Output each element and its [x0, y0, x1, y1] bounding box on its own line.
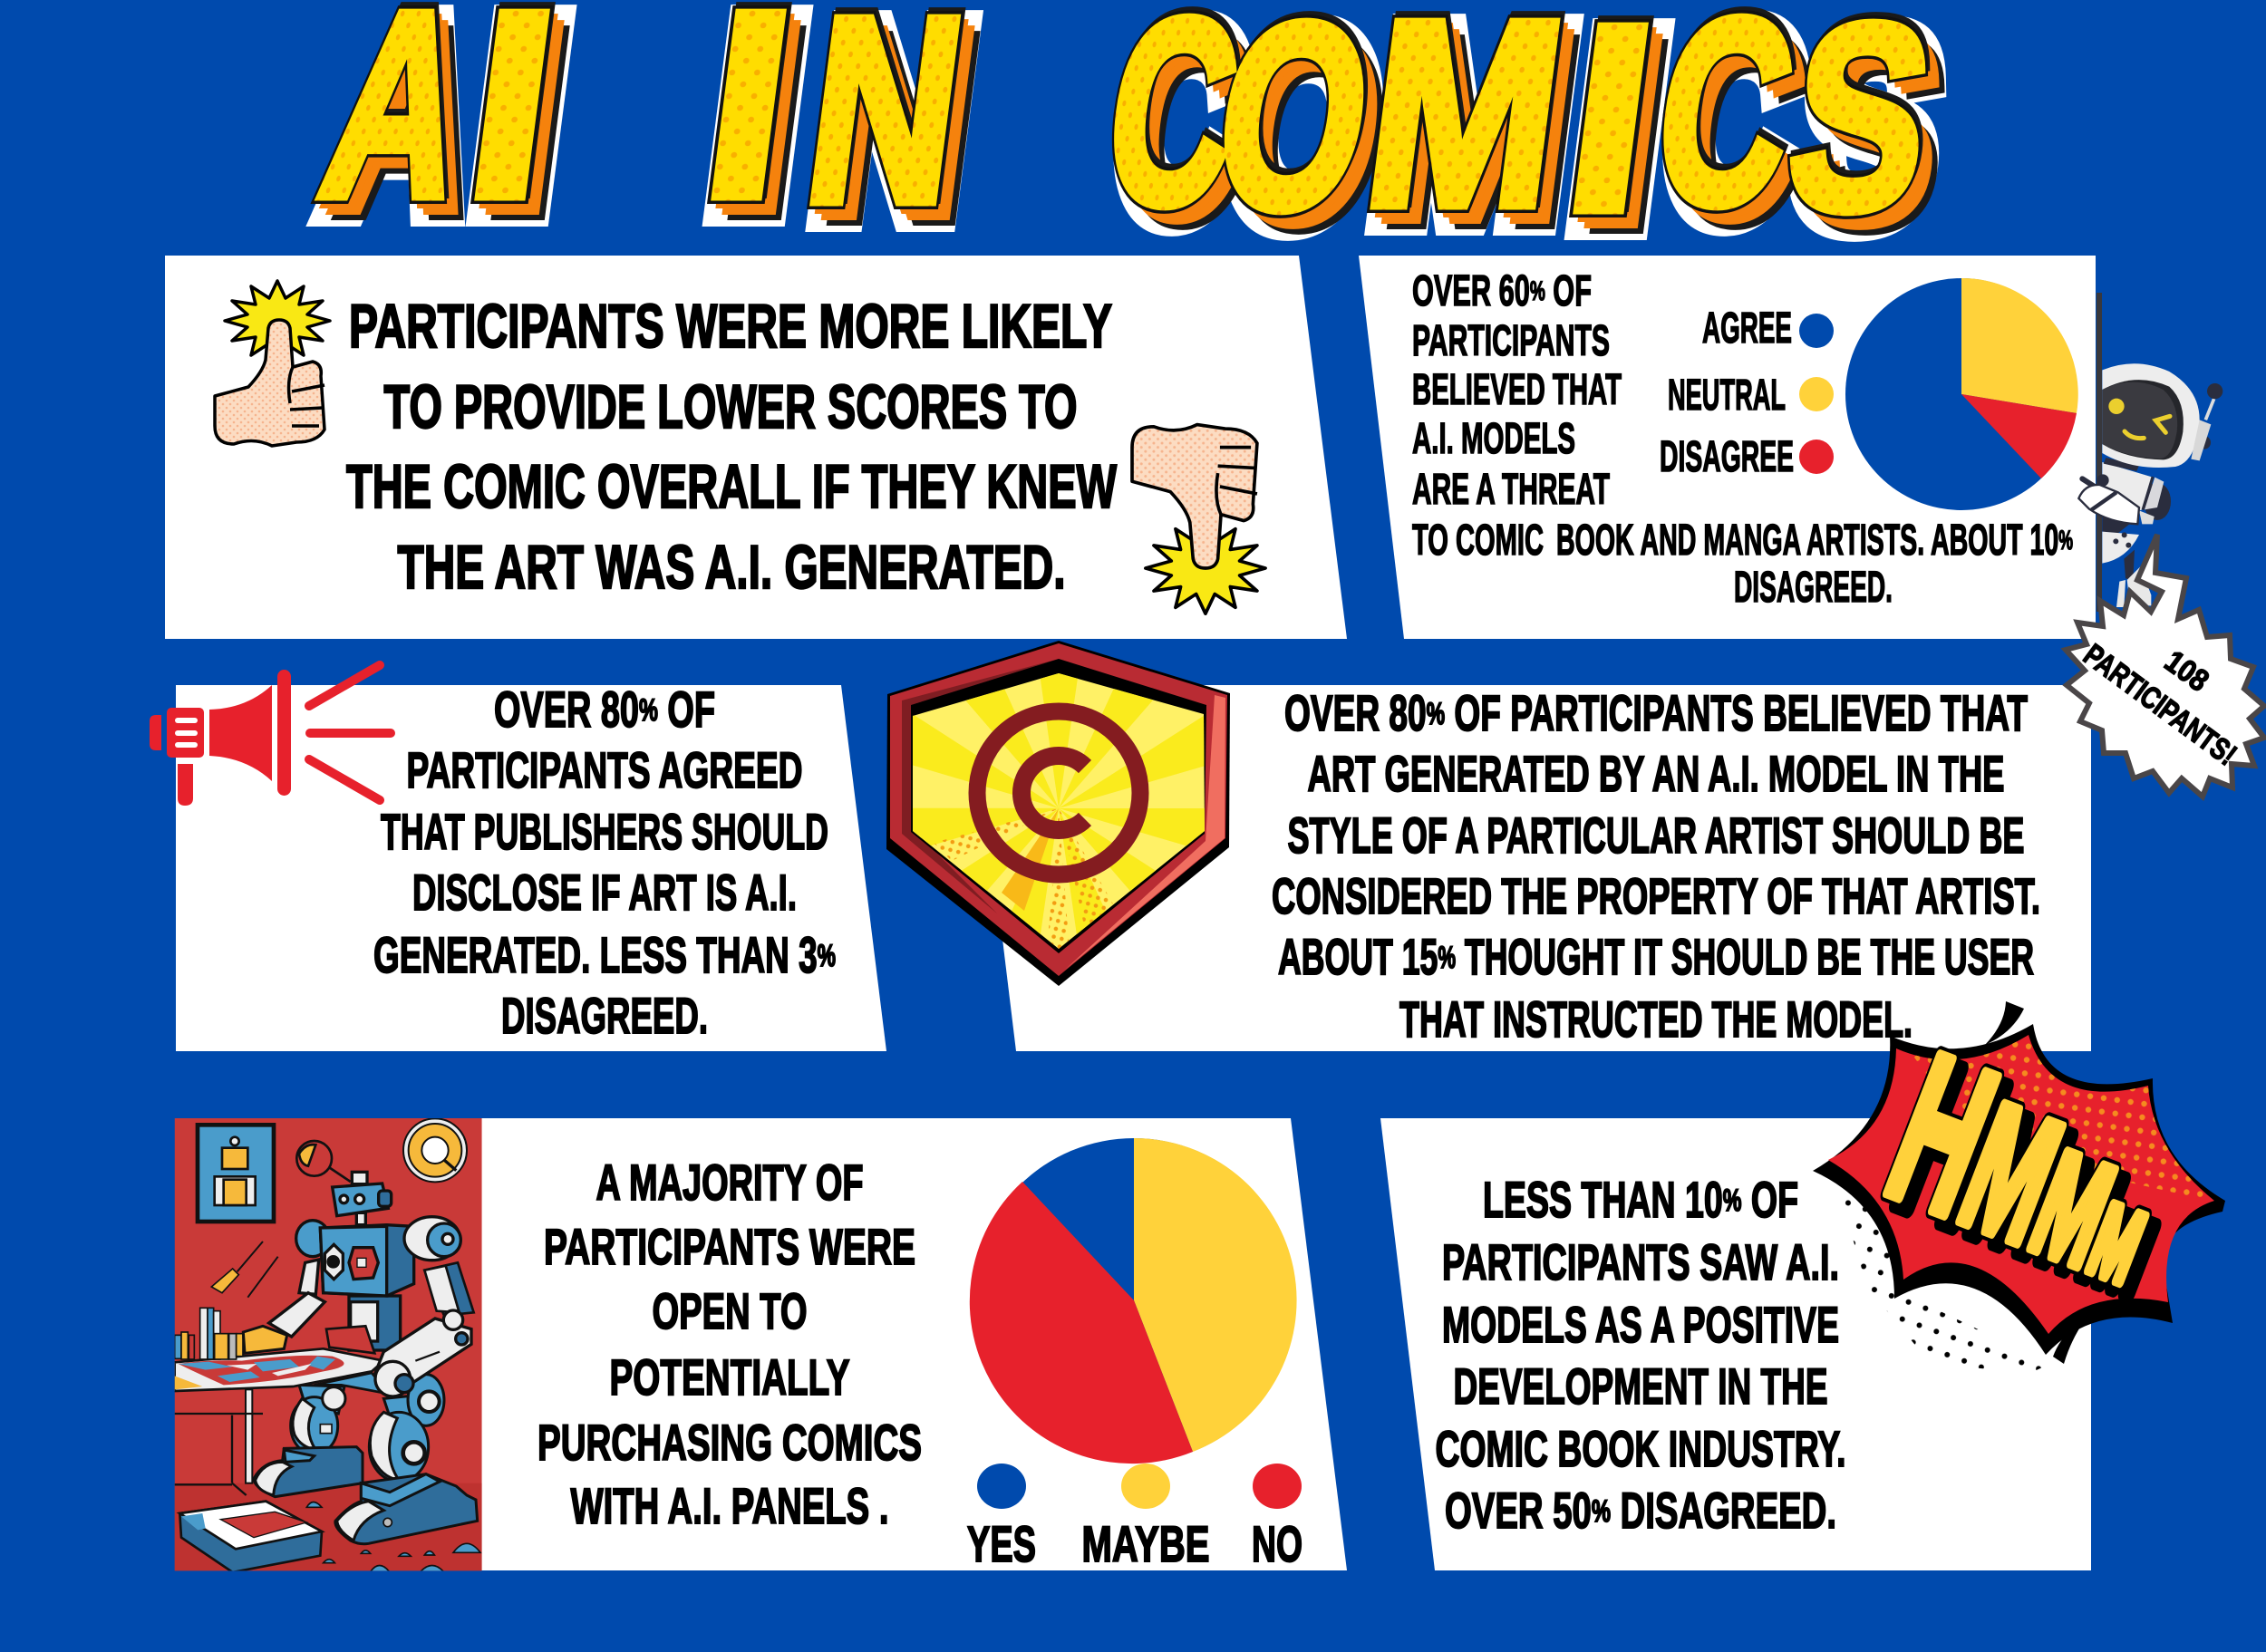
burst: HMMM: HMMM	[1872, 1019, 2203, 1338]
comic box	[179, 1502, 322, 1572]
text block: ownership finding: THAT INSTRUCTED THE MODEL.	[1399, 990, 1913, 1048]
wall picture	[198, 1125, 274, 1222]
panel: positive development	[1380, 1118, 2091, 1570]
text block: threat finding: %	[1530, 276, 1545, 306]
pie chart: threat	[1845, 278, 2078, 510]
text block: lower scores: TO PROVIDE LOWER SCORES TO	[384, 372, 1077, 441]
text block: threat finding: ARE A THREAT	[1412, 466, 1610, 514]
text block: positive development finding: PARTICIPANTS SAW A.I.	[1442, 1233, 1839, 1290]
icon: thumbs up	[215, 281, 330, 446]
text block: purchasing finding: WITH A.I. PANELS .	[571, 1477, 888, 1534]
panel: disclosure	[176, 681, 886, 1051]
text block: ownership finding	[1272, 684, 2040, 1048]
badge: 108 participants: 108	[2158, 644, 2215, 699]
text block: positive development finding	[1436, 1171, 1845, 1539]
halftone dots behind burst	[1840, 1196, 2050, 1373]
burst: HMMM: HMMM	[1863, 1009, 2193, 1328]
painting hands	[243, 1326, 374, 1353]
text block: purchasing finding: PARTICIPANTS WERE	[544, 1218, 915, 1275]
icon: thumbs down	[1132, 425, 1265, 613]
text block: purchasing finding	[537, 1154, 922, 1534]
text block: disclosure finding: PARTICIPANTS AGREED	[406, 741, 803, 798]
text block: ownership finding: %	[1427, 697, 1445, 731]
text block: threat finding: PARTICIPANTS	[1412, 317, 1610, 365]
panel: lower scores finding	[165, 256, 1347, 639]
text block: lower scores: PARTICIPANTS WERE MORE LIKELY	[349, 292, 1112, 361]
text block: lower scores: THE ART WAS A.I. GENERATED.	[397, 533, 1066, 602]
text block: threat finding: A.I. MODELS	[1412, 415, 1575, 463]
mascot: robot behind panel	[2078, 293, 2222, 612]
text block: disclosure finding	[373, 681, 836, 1044]
legend: agree neutral disagree: NEUTRAL	[1668, 372, 1786, 420]
illustration: robot painting comic	[175, 1118, 482, 1572]
text block: threat finding: OVER 60	[1412, 267, 1596, 315]
text block: disclosure finding: OF	[658, 681, 715, 738]
text block: disclosure finding: %	[818, 939, 836, 973]
table	[175, 1348, 390, 1495]
text block: positive development finding: MODELS AS A POSITIVE	[1442, 1296, 1839, 1353]
icon: copyright shield	[886, 641, 1230, 986]
front arm	[374, 1310, 471, 1396]
text block: threat finding	[1412, 267, 2073, 612]
text block: positive development finding: LESS THAN 10	[1483, 1171, 1841, 1228]
text block: disclosure finding: DISAGREED.	[501, 987, 708, 1044]
text block: purchasing finding: A MAJORITY OF	[596, 1154, 863, 1211]
text block: positive development finding: OF	[1741, 1171, 1798, 1228]
text block: lower scores	[346, 292, 1118, 602]
text block: purchasing finding: POTENTIALLY	[609, 1348, 850, 1406]
panel: purchasing	[176, 1118, 1347, 1572]
text block: positive development finding: COMIC BOOK INDUSTRY.	[1436, 1420, 1845, 1477]
legend: yes maybe no	[967, 1464, 1302, 1572]
legend: yes maybe no: YES	[967, 1515, 1036, 1572]
badge: 108 participants	[2066, 535, 2264, 797]
icon: megaphone	[150, 665, 391, 806]
text block: positive development finding: DEVELOPMENT IN THE	[1454, 1357, 1827, 1415]
text block: disclosure finding: %	[639, 693, 658, 728]
text block: positive development finding: OVER 50	[1445, 1482, 1660, 1539]
paint tubes	[175, 1241, 278, 1359]
robot torso and head	[269, 1172, 460, 1350]
text block: disclosure finding: DISCLOSE IF ART IS A.I.	[412, 864, 797, 921]
text block: positive development finding: DISAGREED.	[1611, 1482, 1836, 1539]
text block: disclosure finding: OVER 80	[494, 681, 709, 738]
text block: purchasing finding: OPEN TO	[653, 1282, 807, 1339]
legend: agree neutral disagree: DISAGREE	[1660, 433, 1794, 481]
text block: ownership finding: OVER 80	[1284, 684, 1499, 741]
text block: purchasing finding: PURCHASING COMICS	[537, 1414, 922, 1471]
panel: threat to artists	[1359, 256, 2096, 639]
wall disc	[403, 1118, 467, 1182]
legend: agree neutral disagree	[1660, 304, 1834, 481]
text block: threat finding: %	[2058, 526, 2073, 555]
magnifier	[296, 1141, 351, 1182]
rocks	[306, 1502, 480, 1572]
legend: yes maybe no: NO	[1252, 1515, 1302, 1572]
text block: ownership finding: %	[1438, 941, 1456, 975]
text block: positive development finding: %	[1723, 1183, 1741, 1218]
text block: disclosure finding: THAT PUBLISHERS SHOULD	[381, 803, 828, 860]
text block: disclosure finding: GENERATED. LESS THAN 3	[373, 926, 1047, 983]
legend: yes maybe no: MAYBE	[1082, 1515, 1209, 1572]
title: AI IN COMICS	[305, 0, 1964, 285]
robot legs and feet	[254, 1375, 478, 1544]
panel: ownership	[972, 684, 2091, 1051]
text block: threat finding: OF	[1545, 267, 1592, 315]
robot arm rear	[424, 1262, 474, 1316]
legend: agree neutral disagree: AGREE	[1702, 304, 1792, 353]
text block: threat finding: BELIEVED THAT	[1412, 366, 1622, 414]
burst: HMMM	[1813, 1001, 2230, 1364]
pie chart: purchasing	[970, 1138, 1297, 1464]
text block: lower scores: THE COMIC OVERALL IF THEY KNEW	[346, 452, 1118, 521]
burst: HMMM: HMMM	[1863, 1009, 2193, 1328]
text block: positive development finding: %	[1592, 1494, 1611, 1529]
text block: threat finding: TO COMIC	[1412, 517, 1544, 565]
text block: ownership finding: ABOUT 15	[1278, 928, 1529, 985]
text block: threat finding: DISAGREED.	[1734, 564, 1893, 612]
